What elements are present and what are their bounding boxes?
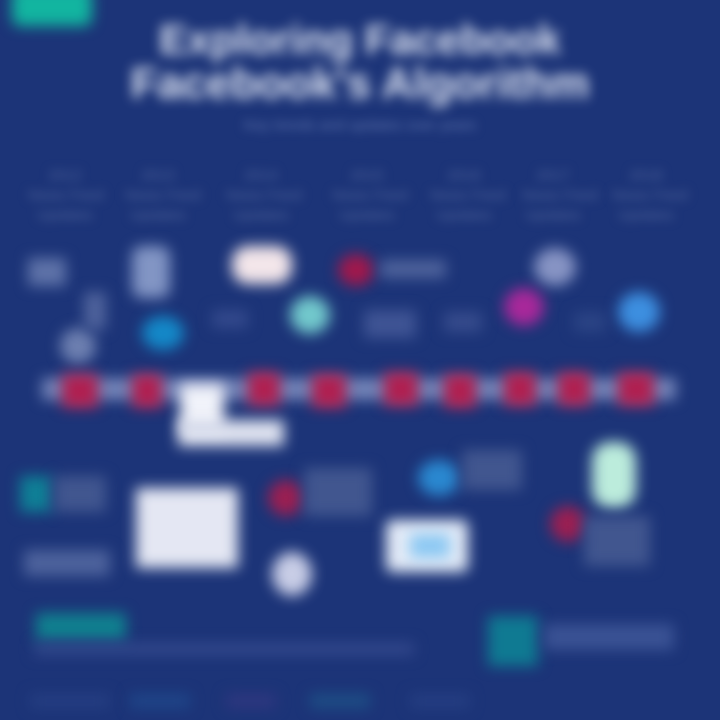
timeline year labels: Updates	[37, 207, 93, 224]
timeline year labels: News Feed	[612, 187, 688, 204]
timeline year labels: Updates	[436, 207, 492, 224]
timeline year labels: 2013	[141, 167, 175, 184]
timeline year labels: 2018	[629, 167, 663, 184]
footer items	[133, 691, 370, 711]
lower panels	[12, 432, 655, 606]
timeline year labels	[28, 167, 688, 224]
timeline year labels: 2016	[447, 167, 481, 184]
timeline year labels: News Feed	[332, 187, 408, 204]
timeline year labels: News Feed	[430, 187, 506, 204]
title	[124, 16, 596, 116]
timeline year labels: News Feed	[125, 187, 201, 204]
title: Facebook's Algorithm	[131, 59, 589, 108]
timeline year labels: Updates	[339, 207, 395, 224]
subtitle: Key trends and updates over years	[244, 117, 476, 134]
callout: white card on timeline	[166, 373, 295, 457]
title: Exploring Facebook	[159, 16, 561, 63]
timeline year labels: 2017	[536, 167, 570, 184]
bottom banner left	[28, 605, 412, 657]
timeline year labels: News Feed	[28, 187, 104, 204]
timeline year labels: Updates	[618, 207, 674, 224]
timeline year labels: 2015	[350, 167, 384, 184]
timeline year labels: Updates	[130, 207, 186, 224]
timeline year labels: Updates	[525, 207, 581, 224]
timeline year labels: 2014	[244, 167, 278, 184]
timeline year labels: News Feed	[226, 187, 302, 204]
timeline year labels: Updates	[233, 207, 289, 224]
timeline year labels: 2012	[48, 167, 82, 184]
upper icons and labels	[20, 234, 668, 370]
timeline year labels: News Feed	[522, 187, 598, 204]
timeline bar	[34, 362, 684, 418]
bottom banner right	[480, 608, 678, 674]
badge: top left	[12, 0, 92, 26]
